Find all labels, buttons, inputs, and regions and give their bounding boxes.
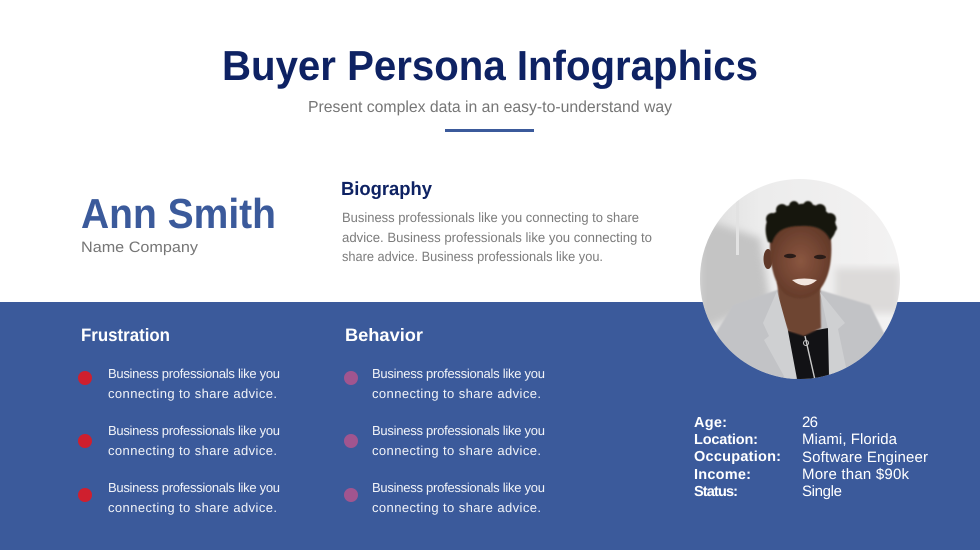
zipper: [805, 336, 815, 380]
subtitle: Present complex data in an easy-to-understand way: [308, 99, 672, 116]
eyes: [784, 254, 796, 258]
persona details: [694, 414, 928, 500]
persona details: Income:: [694, 467, 751, 483]
behavior item 3: [344, 480, 545, 515]
persona details: Miami, Florida: [802, 431, 898, 448]
behavior item 3: connecting to share advice.: [372, 500, 541, 515]
panel: frustration: [78, 325, 280, 515]
persona details: 26: [802, 414, 818, 431]
biography block: [341, 179, 652, 264]
heading: behavior: Behavior: [345, 325, 423, 345]
persona details: Status:: [694, 484, 738, 500]
frustration item 3: [78, 480, 280, 515]
frustration item 3: connecting to share advice.: [108, 500, 277, 515]
title: Buyer Persona Infographics: [222, 42, 758, 89]
smile: [792, 278, 817, 286]
right lapel: [820, 292, 847, 376]
blazer: [716, 290, 885, 380]
behavior item 2: [344, 423, 545, 458]
black top: [786, 328, 830, 380]
left lapel: [763, 291, 797, 379]
persona details: Single: [802, 483, 842, 500]
portrait photo: [700, 179, 900, 380]
frustration item 1: connecting to share advice.: [108, 386, 277, 401]
persona details: Location:: [694, 432, 758, 448]
persona name block: [81, 190, 276, 256]
biography block: advice. Business professionals like you connecting to: [342, 230, 652, 245]
biography block: share advice. Business professionals like you.: [342, 249, 603, 264]
panel: behavior: [344, 325, 545, 515]
ear: [764, 249, 772, 269]
behavior item 1: connecting to share advice.: [372, 386, 541, 401]
frustration item 2: Business professionals like you: [108, 423, 280, 438]
frustration item 2: connecting to share advice.: [108, 443, 277, 458]
heading: frustration: Frustration: [81, 325, 170, 345]
frustration item 1: Business professionals like you: [108, 366, 280, 381]
persona details: Age:: [694, 415, 727, 431]
behavior item 1: [344, 366, 545, 401]
behavior item 2: connecting to share advice.: [372, 443, 541, 458]
title underline: [445, 129, 534, 132]
persona details: Occupation:: [694, 449, 781, 465]
frustration item 3: Business professionals like you: [108, 480, 280, 495]
persona name block: Ann Smith: [81, 190, 276, 237]
background panel: blue lower band: [0, 302, 980, 550]
behavior item 1: Business professionals like you: [372, 366, 545, 381]
biography block: Biography: [341, 179, 432, 200]
behavior item 2: Business professionals like you: [372, 423, 545, 438]
frustration item 1: [78, 366, 280, 401]
biography block: Business professionals like you connecting to share: [342, 210, 639, 225]
neck: [777, 282, 821, 336]
face: [770, 224, 831, 298]
behavior item 3: Business professionals like you: [372, 480, 545, 495]
persona name block: Name Company: [81, 239, 199, 256]
persona details: Software Engineer: [802, 449, 928, 466]
hair: [766, 201, 837, 243]
frustration item 2: [78, 423, 280, 458]
persona details: More than $90k: [802, 466, 910, 483]
